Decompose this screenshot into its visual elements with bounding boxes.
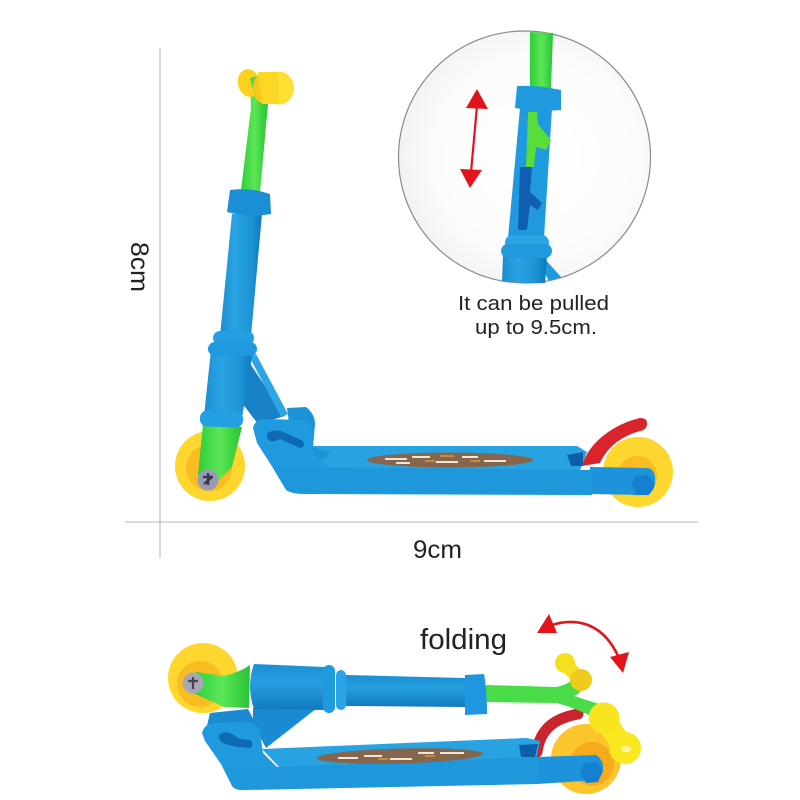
hinge plate xyxy=(253,419,327,468)
folded strut xyxy=(253,708,317,748)
hinge slot xyxy=(267,430,304,448)
folded green stem xyxy=(486,674,599,716)
lens background xyxy=(398,31,650,283)
zoom circle: telescoping stem xyxy=(398,31,650,283)
caption: pull length: up to 9.5cm. xyxy=(475,317,597,339)
upper tube xyxy=(220,214,262,336)
front wheel xyxy=(175,431,245,501)
folded hinge slot xyxy=(219,732,252,748)
folded collar xyxy=(465,674,487,715)
stem rings xyxy=(208,331,257,356)
front tube xyxy=(204,350,253,418)
lower strut xyxy=(544,258,561,281)
deck top and notch xyxy=(300,446,587,472)
folded handlebar grips xyxy=(555,653,641,764)
width dimension line xyxy=(125,521,698,523)
collar xyxy=(515,86,561,111)
folding label: folding xyxy=(420,624,507,656)
folded deck top xyxy=(262,738,540,768)
folding curved arrow xyxy=(537,614,629,673)
front fork xyxy=(198,424,242,481)
folded scooter xyxy=(168,643,641,794)
green stem xyxy=(241,82,268,192)
green inner stem xyxy=(530,32,553,88)
unfolded scooter xyxy=(175,67,673,507)
caption: pull length xyxy=(458,293,609,339)
folded deck body xyxy=(222,757,538,790)
folded axle screw xyxy=(182,672,204,694)
rear hex bolt xyxy=(632,475,655,495)
folded rear fork xyxy=(537,755,603,784)
back hinge plate xyxy=(287,407,331,462)
folded rings xyxy=(323,665,346,713)
rings xyxy=(501,235,552,258)
height label: 8cm xyxy=(125,242,153,292)
lower ring xyxy=(200,410,243,428)
handlebar grips xyxy=(235,67,294,104)
height dimension line xyxy=(159,48,161,558)
folded inner tube xyxy=(346,675,465,707)
folded front wheel xyxy=(168,643,238,713)
folded outer tube xyxy=(250,664,325,710)
red double arrow xyxy=(460,89,488,188)
deck body xyxy=(273,467,592,495)
folded rear wheel xyxy=(551,724,621,794)
slot dark section xyxy=(518,167,542,230)
caption: pull length: It can be pulled xyxy=(458,293,609,315)
folded fork xyxy=(193,665,250,708)
width label: 9cm xyxy=(413,536,462,564)
folded back hinge xyxy=(206,709,256,730)
inner green section xyxy=(526,112,551,167)
tube collar xyxy=(227,189,271,216)
deck sticker xyxy=(367,452,533,468)
axle screw xyxy=(198,470,218,490)
rear fender xyxy=(582,418,647,466)
rear fork arm xyxy=(590,467,655,495)
folded deck sticker xyxy=(317,746,483,766)
folding strut xyxy=(242,356,285,424)
folded hex bolt xyxy=(580,762,603,783)
folded fender xyxy=(537,714,578,752)
lower tube xyxy=(502,256,547,283)
rear wheel xyxy=(603,437,673,507)
folded hinge plate xyxy=(202,722,277,767)
slotted tube xyxy=(508,108,552,238)
